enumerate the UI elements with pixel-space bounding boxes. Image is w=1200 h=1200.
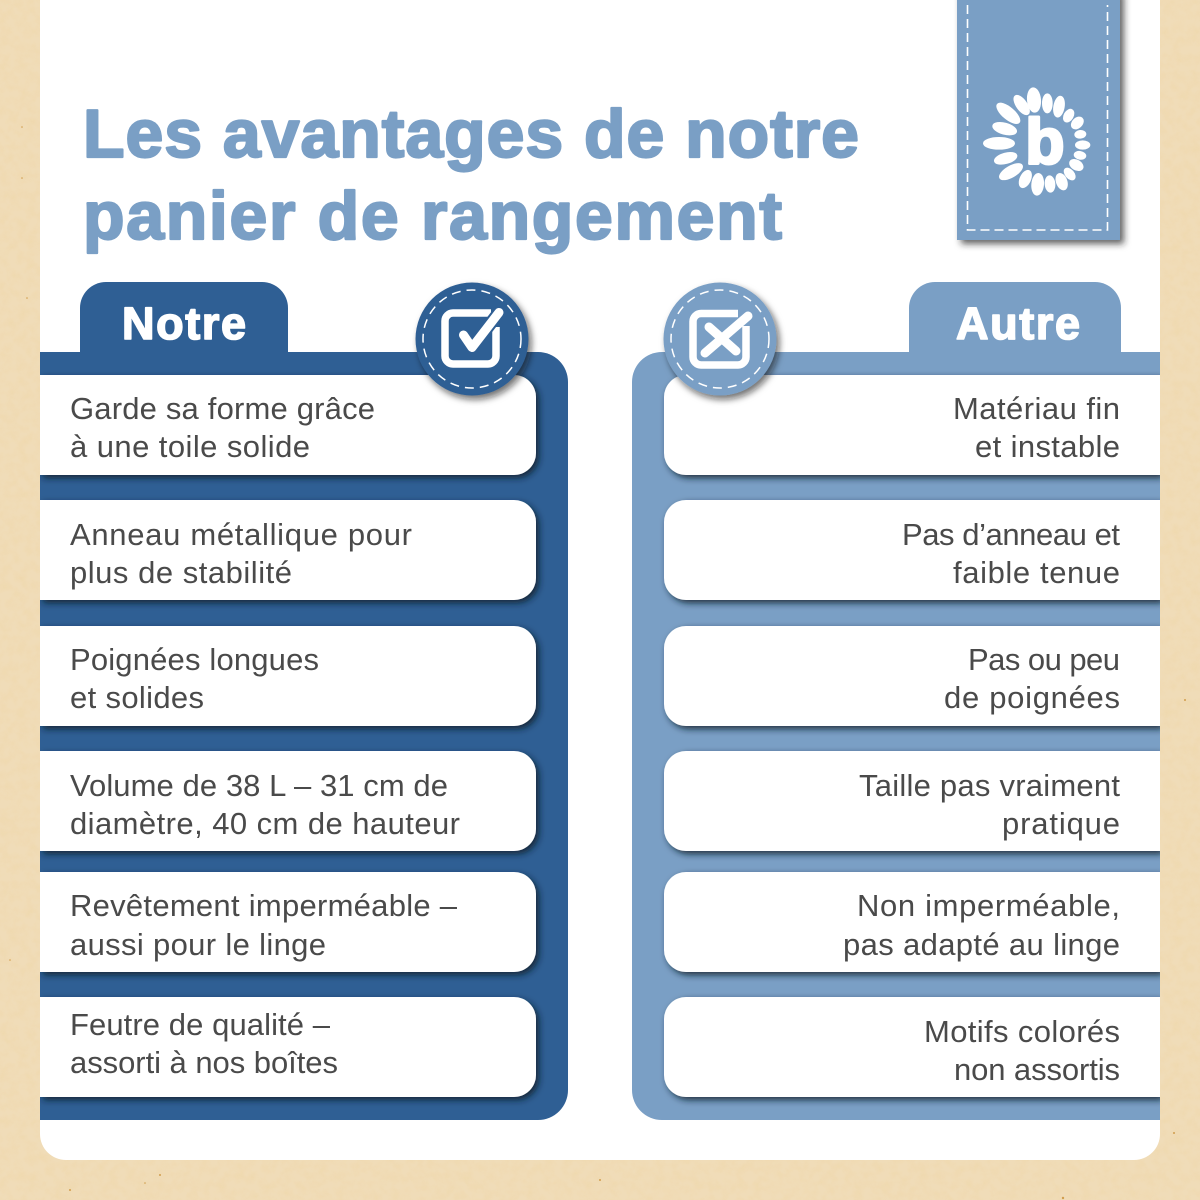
row 3: de poignées bbox=[944, 680, 1120, 715]
row 5: pas adapté au linge bbox=[843, 927, 1120, 962]
row 4 bbox=[664, 751, 1160, 851]
icon: brand flower logo bbox=[984, 87, 1090, 195]
row 1: et instable bbox=[975, 429, 1120, 464]
row 6 bbox=[664, 997, 1160, 1097]
row 1: Garde sa forme grâce bbox=[70, 391, 375, 426]
title bbox=[83, 96, 859, 254]
row 4: pratique bbox=[1002, 806, 1120, 841]
row 1 bbox=[664, 375, 1160, 475]
row 4: Volume de 38 L – 31 cm de bbox=[70, 768, 448, 803]
panel background: autre bbox=[632, 352, 1160, 1120]
row 3 bbox=[664, 626, 1160, 726]
row 6: Feutre de qualité – bbox=[70, 1007, 331, 1042]
row 6: assorti à nos boîtes bbox=[70, 1045, 338, 1080]
row 1: Matériau fin bbox=[953, 391, 1120, 426]
tab: Autre bbox=[909, 282, 1121, 354]
row 4: Taille pas vraiment bbox=[859, 768, 1120, 803]
panel: notre bbox=[40, 282, 568, 1120]
row 3: Poignées longues bbox=[70, 642, 319, 677]
row 2: Pas d’anneau et bbox=[902, 517, 1120, 552]
row 3: et solides bbox=[70, 680, 204, 715]
row 3 bbox=[40, 626, 536, 726]
row 2 bbox=[664, 500, 1160, 600]
row 6: Motifs colorés bbox=[924, 1014, 1120, 1049]
row 2 bbox=[40, 500, 536, 600]
row 5 bbox=[40, 872, 536, 972]
tab: Notre: Notre bbox=[122, 298, 246, 349]
panel: autre bbox=[632, 282, 1160, 1120]
row 5: Non imperméable, bbox=[857, 888, 1120, 923]
row 2: faible tenue bbox=[953, 555, 1120, 590]
row 2: plus de stabilité bbox=[70, 555, 292, 590]
icon: check badge bbox=[416, 282, 528, 396]
row 2: Anneau métallique pour bbox=[70, 517, 412, 552]
icon: brand flower logo: b bbox=[1025, 106, 1064, 178]
tab: Autre: Autre bbox=[956, 298, 1080, 349]
brand label tag bbox=[957, 0, 1120, 240]
title: Les avantages de notre bbox=[83, 96, 859, 172]
row 4: diamètre, 40 cm de hauteur bbox=[70, 806, 460, 841]
row 4 bbox=[40, 751, 536, 851]
row 5: Revêtement imperméable – bbox=[70, 888, 458, 923]
rows: autre bbox=[664, 375, 1160, 1097]
tab: Notre bbox=[80, 282, 288, 354]
panel background: notre bbox=[40, 352, 568, 1120]
rows: notre bbox=[40, 375, 536, 1097]
row 1 bbox=[40, 375, 536, 475]
icon: cross badge bbox=[664, 282, 776, 396]
row 5: aussi pour le linge bbox=[70, 927, 326, 962]
row 6 bbox=[40, 997, 536, 1097]
row 6: non assortis bbox=[954, 1052, 1120, 1087]
title: panier de rangement bbox=[83, 178, 782, 254]
row 5 bbox=[664, 872, 1160, 972]
row 3: Pas ou peu bbox=[968, 642, 1120, 677]
row 1: à une toile solide bbox=[70, 429, 310, 464]
